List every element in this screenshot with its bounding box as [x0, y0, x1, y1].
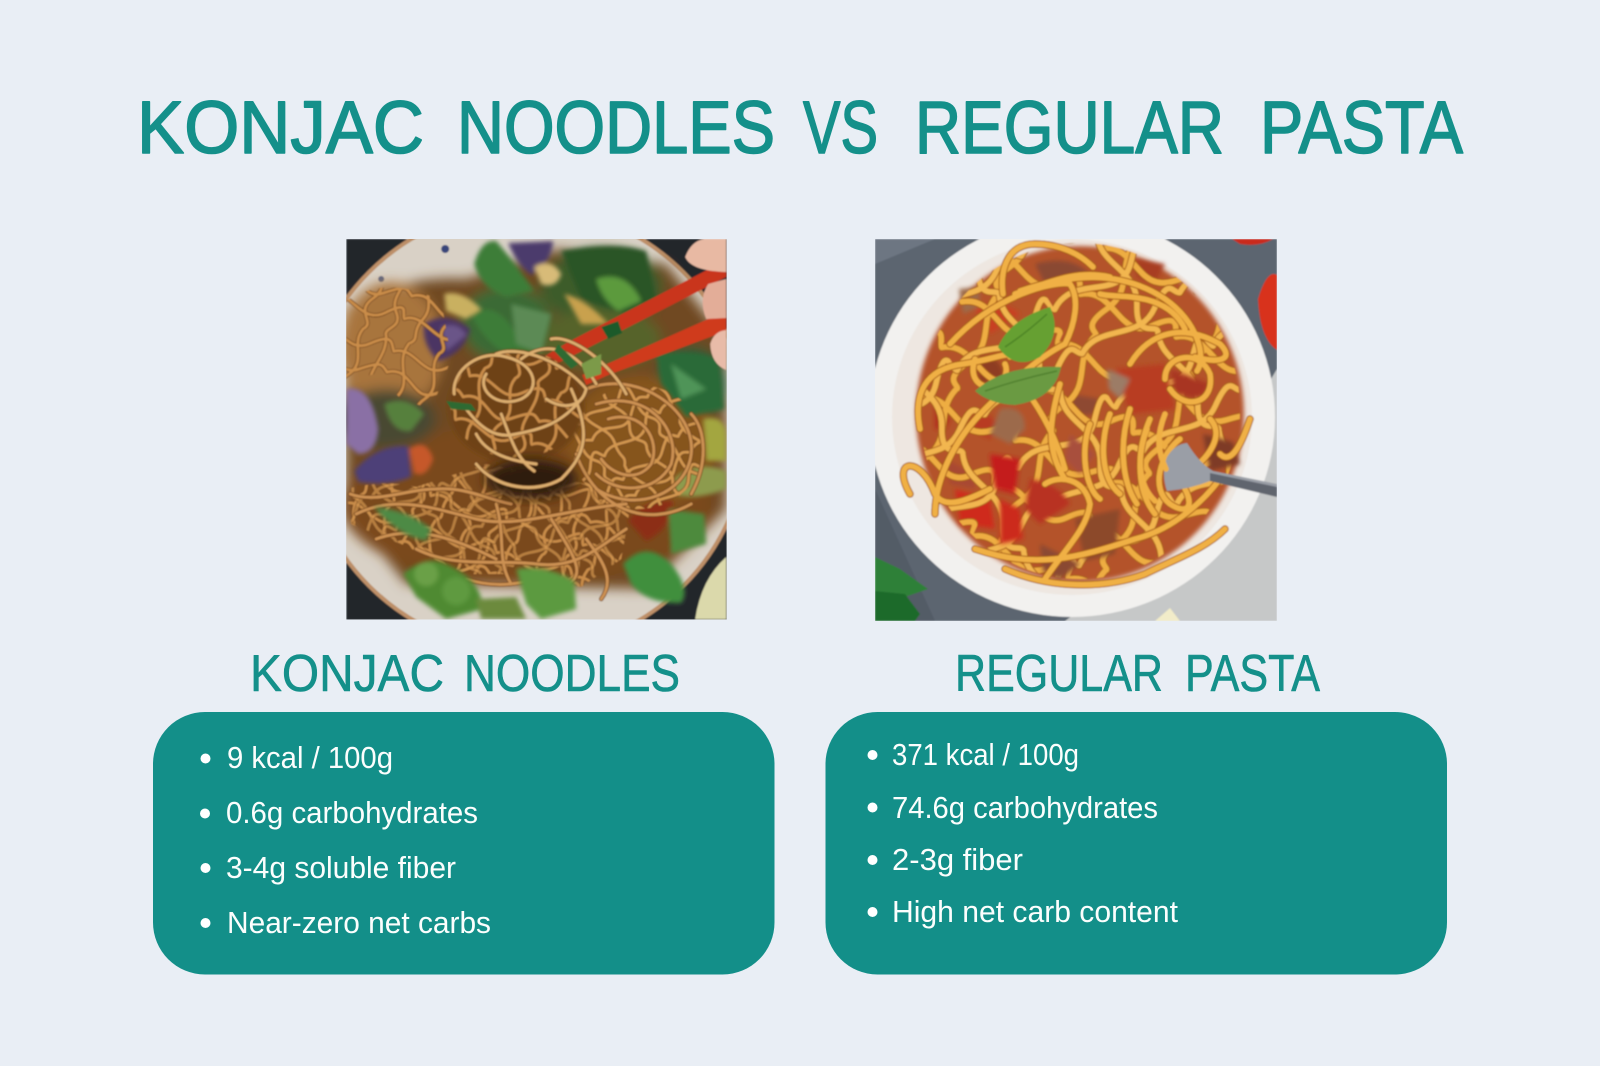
image: konjac noodle stir-fry with chopsticks: [346, 239, 727, 620]
heading: regular pasta: PASTA: [1185, 645, 1320, 703]
spaghetti: [903, 244, 1250, 585]
panel: konjac noodles facts: [153, 712, 774, 974]
fact: calories: 9 kcal / 100g: [227, 740, 393, 775]
title: [137, 86, 1464, 169]
title: NOODLES: [457, 86, 775, 169]
fact: soluble fiber: 3-4g soluble fiber: [226, 850, 456, 885]
noodles: [350, 384, 703, 599]
chopsticks: [546, 269, 727, 364]
veg back: [346, 241, 726, 554]
title: VS: [803, 86, 878, 169]
fact: calories: 371 kcal / 100g: [892, 737, 1079, 772]
panel: regular pasta facts: [826, 712, 1447, 974]
spaghetti texture: [920, 243, 1240, 579]
basil leaves: [998, 307, 1055, 362]
title: PASTA: [1260, 86, 1464, 169]
fingers: [685, 239, 726, 272]
noodle texture: [346, 288, 451, 409]
image: spaghetti bolognese with fork: [869, 217, 1277, 621]
title: REGULAR: [915, 86, 1224, 169]
fact: net carbs: Near-zero net carbs: [227, 905, 491, 940]
heading: konjac noodles: KONJAC: [250, 645, 444, 703]
fact: fiber: 2-3g fiber: [892, 842, 1023, 877]
fact: net carbs: High net carb content: [892, 894, 1178, 929]
fork: [1164, 443, 1277, 497]
sauce chunks: [935, 259, 1165, 529]
fact: carbohydrates: 0.6g carbohydrates: [226, 795, 478, 830]
veg front: [374, 507, 685, 619]
noodle ball: [448, 351, 584, 463]
meat and tomato chunks over noodles: [990, 364, 1240, 579]
fact: carbohydrates: 74.6g carbohydrates: [892, 790, 1158, 825]
heading: konjac noodles: NOODLES: [464, 645, 680, 703]
heading: regular pasta: [955, 645, 1320, 703]
heading: regular pasta: REGULAR: [955, 645, 1163, 703]
title: KONJAC: [137, 86, 424, 169]
heading: konjac noodles: [250, 645, 680, 703]
